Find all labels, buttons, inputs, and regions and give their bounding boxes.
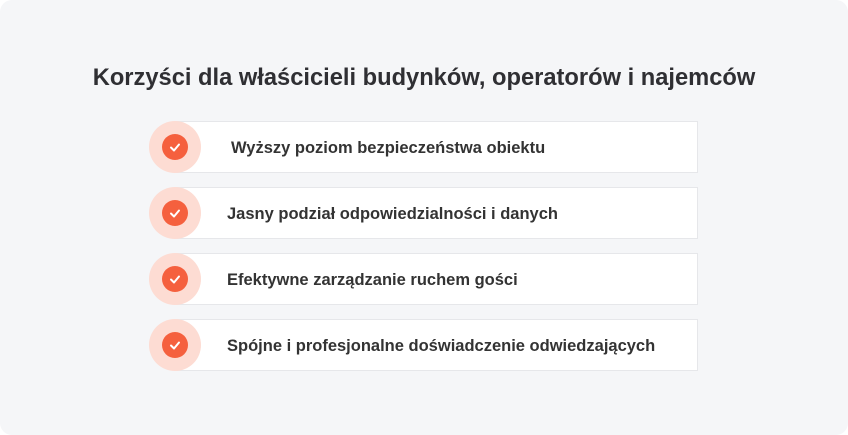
item 1: Wyższy poziom bezpieczeństwa obiektu (231, 139, 545, 157)
icon: check (162, 134, 188, 160)
item 4 (149, 319, 698, 371)
item 2 (149, 187, 698, 239)
icon: check (162, 266, 188, 292)
title: Korzyści dla właścicieli budynków, operatorów i najemców (93, 65, 755, 91)
item 3 (149, 253, 698, 305)
item 3: Efektywne zarządzanie ruchem gości (227, 271, 518, 289)
item 1 (149, 121, 698, 173)
icon: check (162, 332, 188, 358)
item 4: Spójne i profesjonalne doświadczenie odwiedzających (227, 337, 655, 355)
item 2: Jasny podział odpowiedzialności i danych (227, 205, 558, 223)
icon: check (162, 200, 188, 226)
